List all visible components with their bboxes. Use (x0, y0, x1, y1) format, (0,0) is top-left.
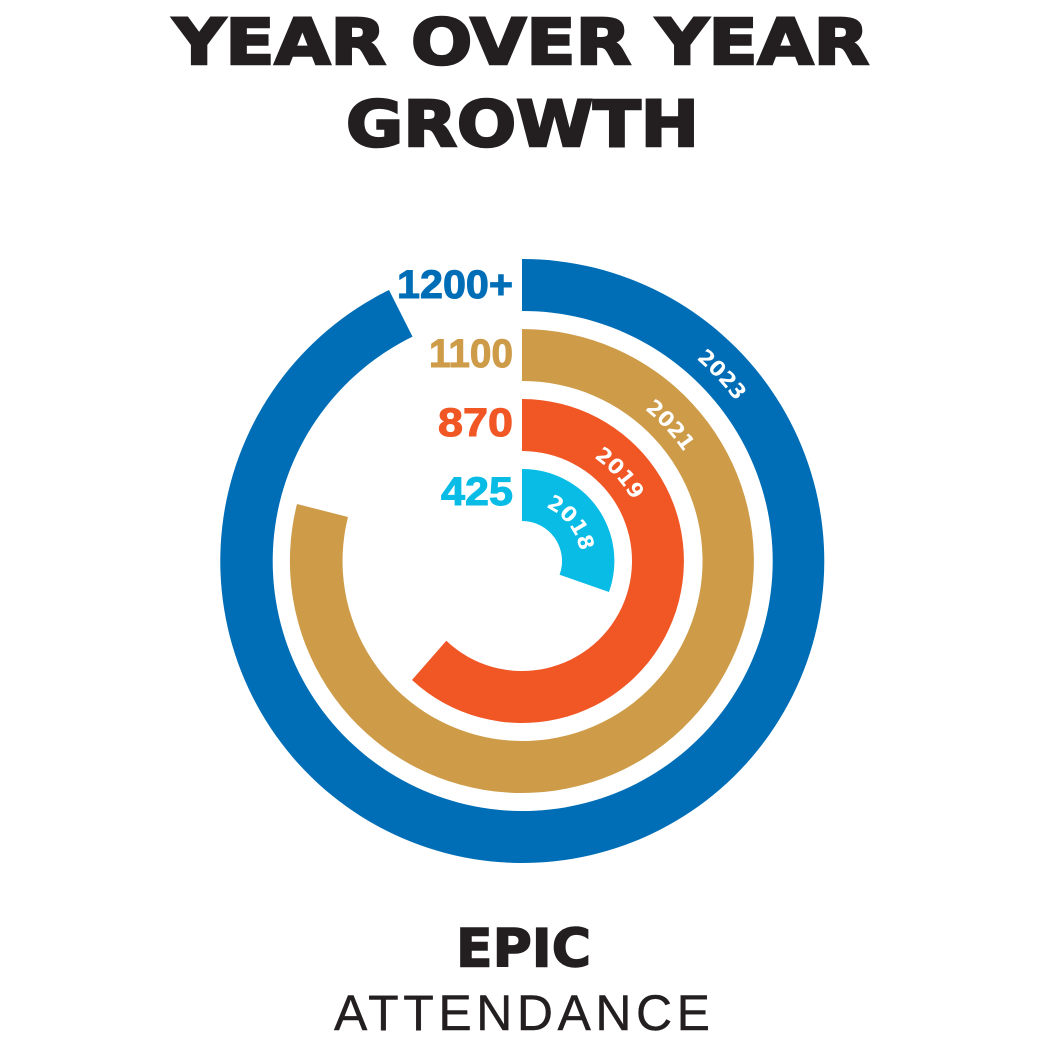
title (172, 6, 869, 161)
caption subheading: ATTENDANCE: ATTENDANCE (334, 985, 710, 1041)
ring: 2018 (522, 469, 614, 592)
caption (334, 918, 710, 1041)
title: YEAR OVER YEAR (172, 6, 869, 79)
ring: 2021 (290, 329, 754, 793)
ring: 2019: 2019 (595, 446, 643, 497)
ring: 2021: 2021 (646, 399, 694, 451)
caption heading: EPIC: EPIC (456, 918, 591, 980)
value labels: 1200+ (397, 263, 513, 307)
value labels: 1100 (429, 332, 513, 376)
title: GROWTH (346, 88, 699, 161)
ring: 2019 (412, 399, 684, 723)
radial bar chart (220, 259, 824, 863)
value labels: 870 (438, 401, 513, 445)
ring: 2023: 2023 (698, 348, 746, 398)
value labels (397, 263, 513, 514)
ring: 2018: 2018 (547, 494, 594, 549)
value labels: 425 (441, 470, 513, 514)
